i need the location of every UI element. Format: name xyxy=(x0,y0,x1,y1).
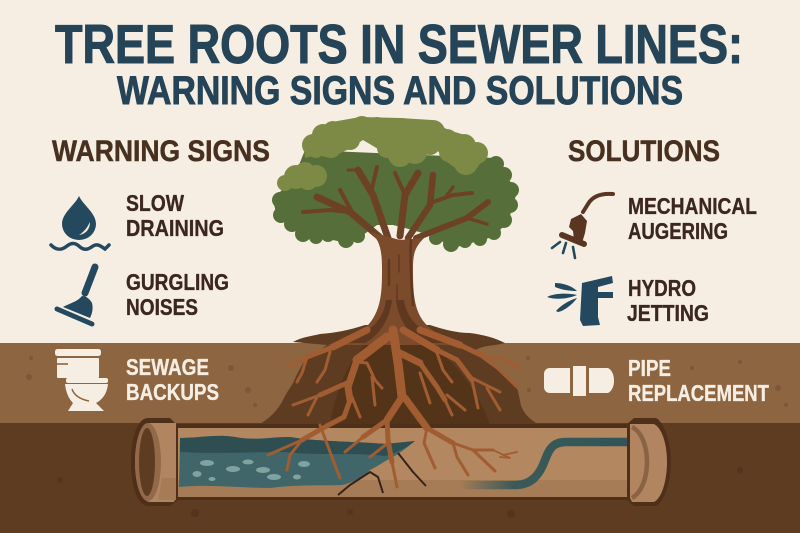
label: hydro jetting: JETTING xyxy=(627,300,709,326)
label: gurgling noises xyxy=(126,269,229,320)
tree trunk and branches xyxy=(303,167,488,345)
label: hydro jetting: HYDRO xyxy=(628,275,696,301)
icon: plunger xyxy=(57,267,95,324)
label: pipe replacement: REPLACEMENT xyxy=(628,380,769,406)
icon: pipe coupling xyxy=(544,366,614,396)
label: slow draining: SLOW xyxy=(126,190,184,216)
tree canopy xyxy=(272,116,519,252)
icon: water drop xyxy=(51,196,109,249)
heading: warning signs: WARNING SIGNS xyxy=(52,135,270,168)
right flange xyxy=(627,418,671,506)
light foliage xyxy=(277,116,488,191)
label: hydro jetting xyxy=(627,275,709,326)
label: gurgling noises: GURGLING xyxy=(126,269,229,295)
label: sewage backups: SEWAGE xyxy=(126,354,209,380)
hose xyxy=(459,442,633,485)
icon: toilet xyxy=(55,349,108,411)
label: mechanical augering: AUGERING xyxy=(628,218,728,244)
soil mound xyxy=(260,325,538,425)
water xyxy=(179,436,415,488)
panel: warning signs xyxy=(51,135,270,411)
icon: mechanical auger xyxy=(552,194,613,258)
label: mechanical augering: MECHANICAL xyxy=(628,193,757,219)
tree roots xyxy=(268,330,520,487)
label: mechanical augering xyxy=(628,193,757,244)
label: sewage backups xyxy=(126,354,219,405)
pipe crack xyxy=(338,453,426,495)
subtitle: WARNING SIGNS AND SOLUTIONS xyxy=(117,69,683,113)
label: pipe replacement: PIPE xyxy=(628,355,671,381)
thick root segments xyxy=(357,330,402,397)
label: gurgling noises: NOISES xyxy=(126,294,198,320)
soil lower layer xyxy=(0,423,800,533)
label: sewage backups: BACKUPS xyxy=(126,379,219,405)
dark foliage xyxy=(272,150,519,252)
pipe xyxy=(131,418,671,506)
label: slow draining: DRAINING xyxy=(126,215,224,241)
left flange xyxy=(131,418,178,506)
panel: solutions xyxy=(544,135,769,406)
soil upper layer xyxy=(0,343,800,428)
label: pipe replacement xyxy=(628,355,769,406)
heading: solutions: SOLUTIONS xyxy=(568,135,720,168)
icon: hydro jet xyxy=(547,276,613,326)
label: slow draining xyxy=(126,190,224,241)
